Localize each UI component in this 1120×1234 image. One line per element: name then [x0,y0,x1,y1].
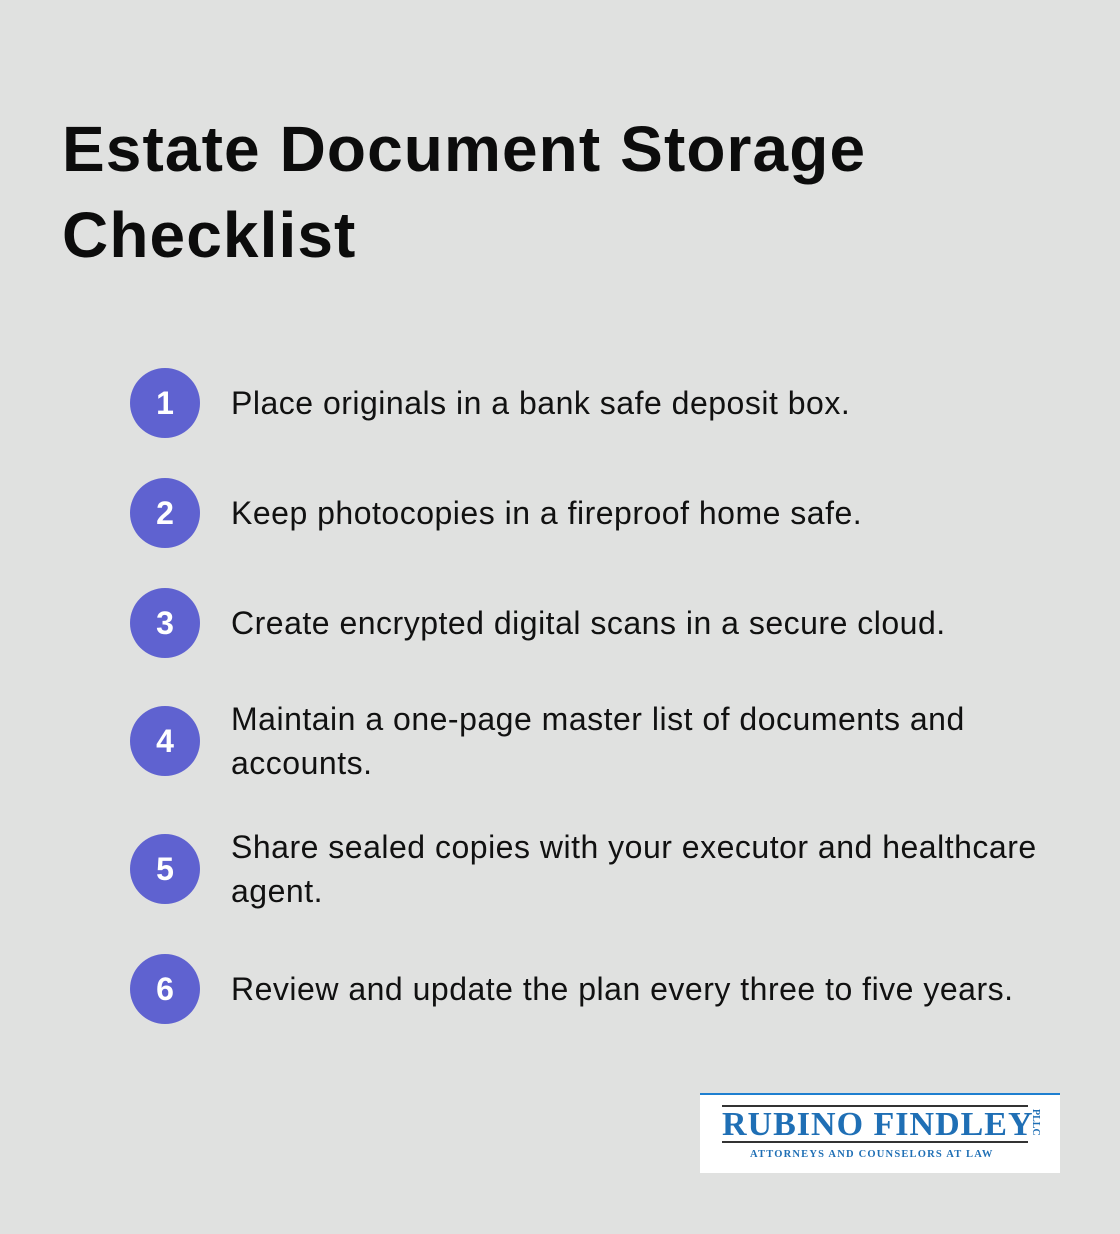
title: Checklist [62,199,356,271]
item 6: Review and update the plan every three to five years. [231,971,1014,1007]
item 2: Keep photocopies in a fireproof home safe. [231,495,862,531]
item 2 [130,478,862,548]
item 3 [130,588,946,658]
title: Estate Document Storage [62,113,866,185]
item 1: 1 [156,385,174,421]
item 6 [130,954,1014,1024]
item 3: 3 [156,605,174,641]
item 5: Share sealed copies with your executor and healthcare agent. [231,829,1037,909]
item 1 [130,368,850,438]
item 3: Create encrypted digital scans in a secure cloud. [231,605,946,641]
title [62,113,866,271]
item 1: Place originals in a bank safe deposit box. [231,385,850,421]
logo: ATTORNEYS AND COUNSELORS AT LAW [750,1149,994,1160]
logo: RUBINO FINDLEY [722,1106,1034,1143]
logo [700,1093,1060,1173]
item 6: 6 [156,971,174,1007]
item 4: Maintain a one-page master list of documents and accounts. [231,701,965,781]
item 5: 5 [156,851,174,887]
item 4: 4 [156,723,174,759]
item 2: 2 [156,495,174,531]
logo: PLLC [1030,1109,1041,1136]
